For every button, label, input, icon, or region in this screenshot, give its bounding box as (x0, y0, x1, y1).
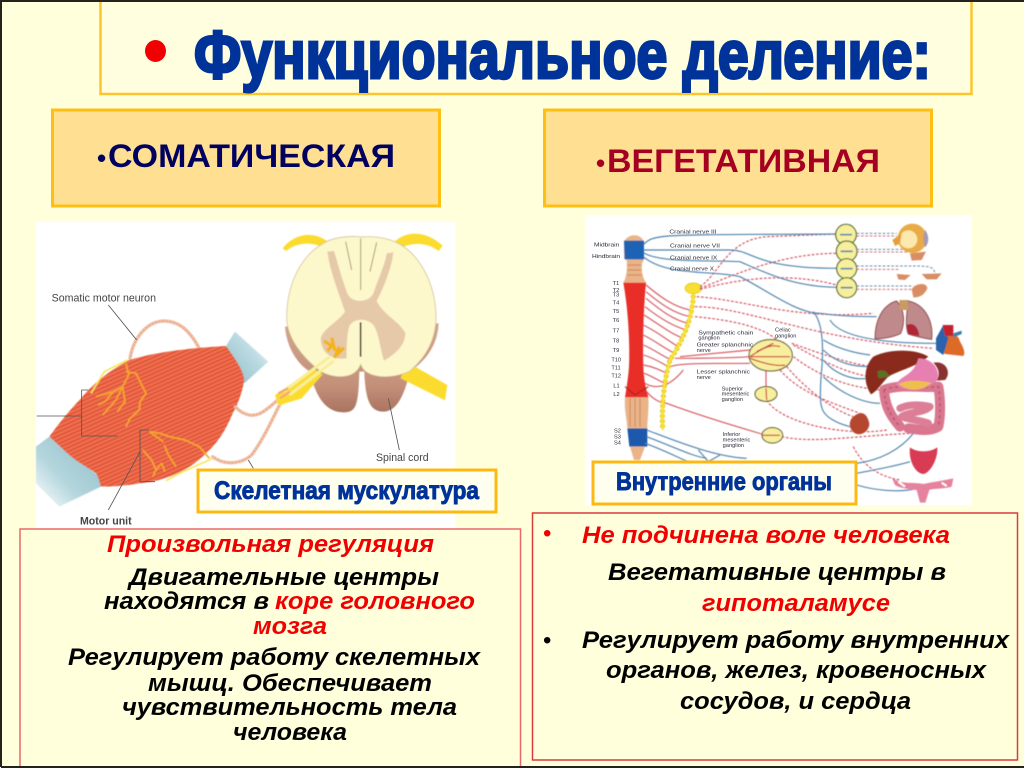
cranial ganglia (836, 224, 857, 298)
labels: T5 (613, 309, 619, 315)
glands (897, 252, 942, 297)
panel: somatic description: человека (233, 719, 347, 746)
labels: T6 (613, 318, 619, 324)
motor axons (130, 321, 287, 463)
panel: autonomic description: Регулирует работу внутренних (582, 627, 1011, 654)
labels: Sympathetic chain (698, 331, 753, 337)
panel: autonomic description: Не подчинена воле человека (582, 522, 950, 549)
nerve endings (91, 360, 213, 481)
labels: Midbrain (594, 243, 619, 249)
labels: T9 (613, 348, 619, 354)
header: somatic (52, 110, 440, 206)
panel: autonomic description (532, 513, 1018, 760)
motor neuron cluster (324, 338, 344, 357)
labels: T8 (613, 338, 619, 344)
intestines (884, 386, 940, 430)
illustration: autonomic nervous system (585, 215, 972, 505)
labels: L2 (613, 392, 620, 398)
title box (100, 0, 972, 94)
header: autonomic (544, 110, 932, 206)
panel: somatic description: мозга (253, 613, 327, 640)
grey matter (321, 251, 405, 361)
labels: L1 (613, 383, 620, 389)
leader lines (37, 305, 399, 510)
labels (592, 229, 796, 449)
kidney (850, 413, 869, 434)
labels: Cranial nerve VII (670, 244, 720, 250)
header: autonomic: • (596, 148, 605, 178)
labels: T1 (613, 281, 619, 287)
illustration: somatic motor neuron, muscle and spinal cord: Motor unit (80, 515, 132, 527)
muscle tendons (36, 332, 268, 507)
label: skeletal muscle (198, 470, 496, 512)
labels: nerve (697, 348, 711, 354)
label: skeletal muscle: Скелетная мускулатура (214, 477, 480, 505)
illustration: somatic motor neuron, muscle and spinal cord (36, 222, 455, 537)
panel: autonomic description: • (543, 627, 551, 654)
labels: Lesser splanchnic (697, 370, 750, 376)
labels: T3 (613, 293, 619, 299)
panel: autonomic description: органов, желез, кровеносных (606, 657, 988, 684)
labels: T7 (613, 329, 619, 335)
labels: ganglion (722, 397, 743, 403)
yellow nerve roots (275, 234, 447, 406)
stomach (896, 358, 938, 390)
labels: T4 (613, 301, 619, 307)
title bullet (145, 40, 166, 62)
uterus (892, 477, 953, 503)
spinal cord white matter (287, 236, 436, 377)
labels: ganglion (775, 333, 796, 339)
panel: somatic description: Двигательные центры (127, 564, 440, 591)
liver (866, 351, 928, 394)
celiac and mesenteric ganglia (749, 340, 792, 443)
preganglionic red nerves (643, 285, 766, 434)
illustration: somatic motor neuron, muscle and spinal cord: Spinal cord (376, 452, 429, 464)
labels: S4 (614, 441, 621, 447)
labels: Cranial nerve X (670, 266, 714, 272)
labels: T11 (611, 365, 621, 371)
panel: autonomic description: гипоталамусе (702, 590, 890, 617)
labels: Inferior (723, 432, 740, 438)
blue parasympathetic nerves (643, 234, 937, 491)
spleen (933, 362, 948, 381)
eye (892, 224, 928, 253)
panel: somatic description: чувствительность тела (122, 694, 457, 721)
labels: ganglion (698, 335, 720, 341)
panel: somatic description: Произвольная регуляция (107, 531, 434, 558)
panel: autonomic description: Вегетативные центры в (608, 559, 946, 586)
labels: Cranial nerve IX (670, 256, 718, 262)
spinal column (623, 235, 648, 460)
labels: T2 (613, 288, 619, 294)
panel: somatic description: Регулирует работу скелетных (68, 644, 482, 671)
labels: S3 (614, 435, 621, 441)
labels: ganglion (723, 443, 744, 449)
header: somatic: СОМАТИЧЕСКАЯ (108, 138, 395, 174)
dashed nerves after cranial ganglia (857, 233, 935, 289)
labels: T10 (611, 358, 621, 364)
heart (936, 325, 964, 356)
labels: T12 (611, 373, 621, 379)
labels: mesenteric (722, 391, 749, 397)
labels: Hindbrain (592, 254, 620, 260)
labels: Celiac (775, 327, 791, 333)
labels: nerve (697, 375, 711, 381)
dashed postganglionic nerves (695, 234, 933, 480)
labels: Cranial nerve III (669, 229, 717, 235)
spinal cord brown roots (285, 323, 439, 412)
panel: somatic description (20, 529, 520, 768)
label: internal organs: Внутренние органы (616, 468, 832, 496)
panel: somatic description: коре головного (275, 588, 475, 615)
lungs (875, 300, 932, 339)
labels: Greater splanchnic (697, 342, 754, 348)
labels: Superior (722, 386, 743, 392)
panel: autonomic description: сосудов, и сердца (680, 688, 911, 715)
sympathetic chain (662, 283, 702, 430)
panel: somatic description: мышц. Обеспечивает (148, 670, 432, 697)
header: autonomic: ВЕГЕТАТИВНАЯ (607, 143, 880, 179)
panel: autonomic description: • (543, 520, 551, 547)
muscle belly with fibres (43, 342, 250, 492)
labels: mesenteric (723, 437, 750, 443)
bladder (910, 447, 937, 474)
header: somatic: • (97, 143, 106, 173)
panel: somatic description: находятся в (104, 588, 269, 615)
labels: Somatic motor neuron (52, 293, 156, 305)
label: internal organs (593, 462, 856, 504)
labels: S2 (614, 429, 621, 435)
